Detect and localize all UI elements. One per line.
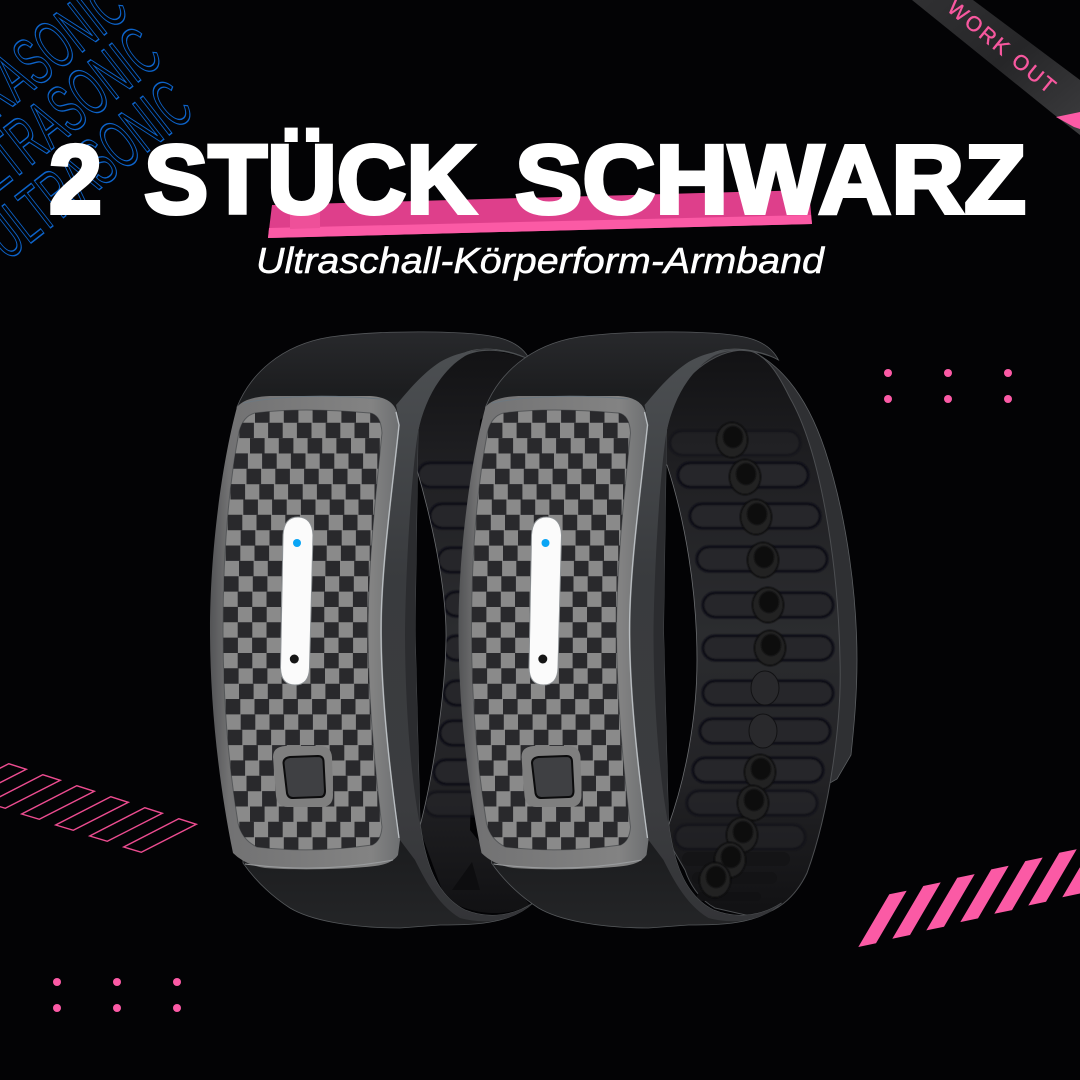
inner strap left <box>410 348 574 913</box>
bracelet left <box>210 332 574 928</box>
opening left <box>414 463 446 826</box>
filled pink stripes: right <box>858 841 1080 947</box>
title <box>49 125 1026 234</box>
front band and panel left <box>210 332 533 928</box>
title: 2 <box>49 125 102 234</box>
outlined pink stripes: left <box>0 764 196 852</box>
dots: bottom left <box>53 978 181 1012</box>
strap holes and pins <box>700 422 786 898</box>
bracelet right <box>458 332 857 928</box>
title: STÜCK <box>144 125 476 234</box>
corner ribbon: work out <box>912 0 1080 135</box>
opening right <box>660 465 697 827</box>
dots: top right <box>884 369 1012 403</box>
pink highlight banner <box>268 190 812 238</box>
front band and panel right <box>458 332 782 928</box>
subtitle: Ultraschall-Körperform-Armband <box>256 240 825 281</box>
inner strap right <box>660 350 840 916</box>
title: SCHWARZ <box>515 125 1026 234</box>
decorative outlined ULTRASONIC text <box>0 0 205 274</box>
outer strap layer <box>700 336 857 800</box>
